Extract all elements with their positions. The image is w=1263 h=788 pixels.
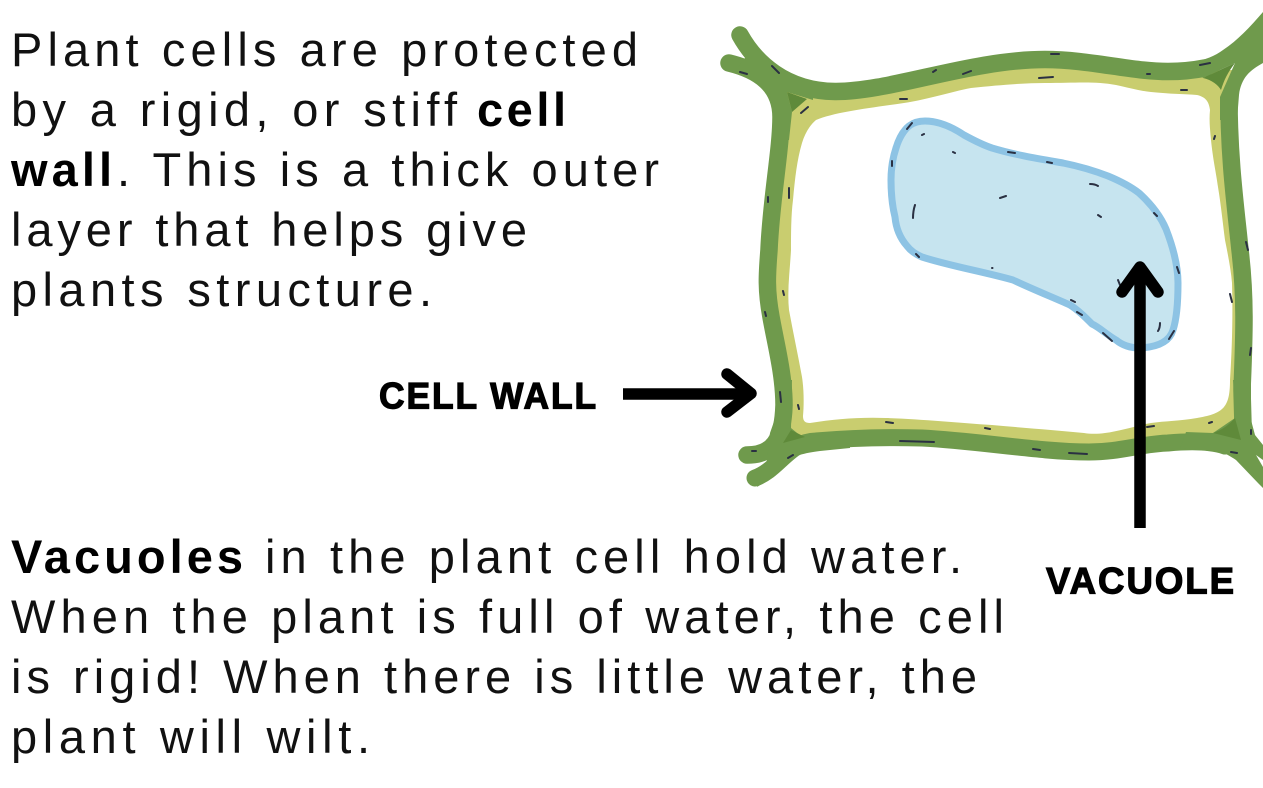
white sliver at bottom right junction (1256, 455, 1263, 467)
text block: cell wall explanation: . This is a thick outer (117, 143, 659, 196)
text block: cell wall explanation: wall (10, 143, 112, 196)
text block: cell wall explanation: layer that helps give (11, 203, 527, 256)
text block: cell wall explanation (10, 23, 659, 316)
illustration: plant cell (729, 12, 1263, 488)
text block: vacuole explanation: is rigid! When there is little water, the (11, 650, 977, 703)
text block: vacuole explanation (11, 530, 1004, 763)
text block: cell wall explanation: cell (477, 83, 566, 136)
text block: vacuole explanation: When the plant is full of water, the cell (11, 590, 1004, 643)
text block: cell wall explanation: by a rigid, or stiff (11, 83, 458, 136)
cell membrane layer: yellow (766, 59, 1243, 452)
wall junctions (735, 12, 1263, 488)
left wall (729, 63, 784, 455)
arrow: to vacuole (1122, 267, 1158, 528)
text block: vacuole explanation: Vacuoles (11, 530, 243, 583)
vacuole (891, 121, 1178, 348)
bottom wall (755, 438, 1225, 478)
arrow: to cell wall (623, 374, 751, 412)
small dashes on cell (740, 54, 1251, 458)
dark green corner wedges (783, 63, 1241, 443)
text block: vacuole explanation: plant will wilt. (11, 710, 370, 763)
text block: cell wall explanation: plants structure. (11, 263, 432, 316)
text block: cell wall explanation: Plant cells are protected (11, 23, 638, 76)
cell interior: white (788, 82, 1232, 434)
label: cell wall: CELL WALL (379, 374, 598, 416)
text block: vacuole explanation: in the plant cell hold water. (265, 530, 962, 583)
right wall (1229, 100, 1244, 425)
green cell wall (729, 35, 1244, 478)
label: vacuole: VACUOLE (1046, 560, 1236, 602)
top wall (740, 35, 1205, 92)
